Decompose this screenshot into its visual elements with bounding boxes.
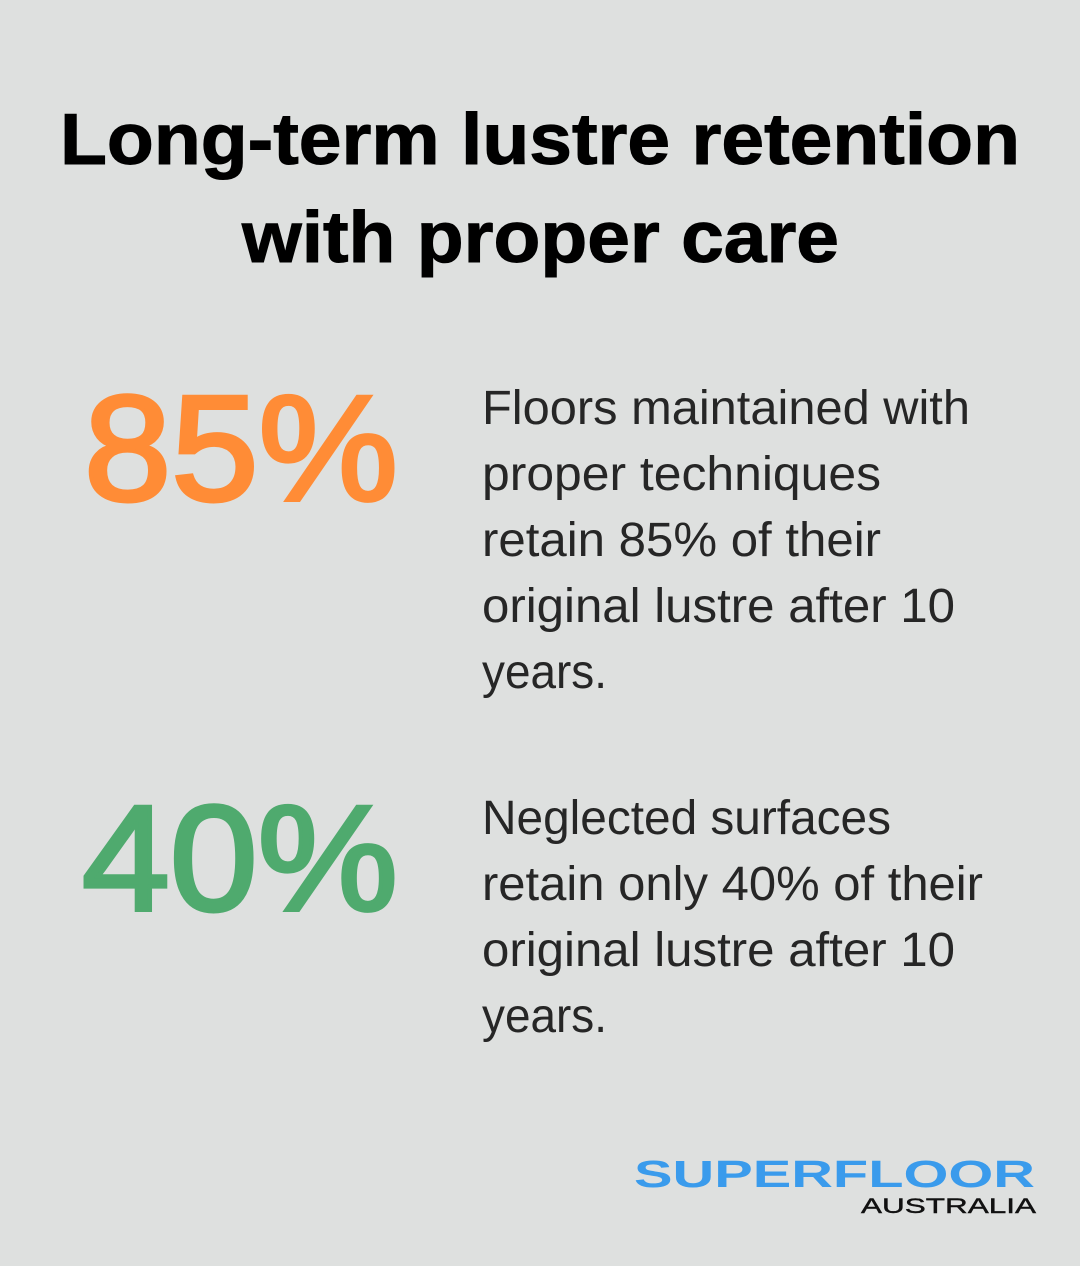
panel: 85% statistic [84,364,970,699]
title: with proper care [241,198,839,278]
title: Long-term lustre retention [60,100,1020,180]
description: proper techniques [482,382,970,699]
title [60,100,1020,278]
stat value: 40%: 40% [82,774,398,942]
description: proper techniques: proper techniques [482,448,881,501]
description: neglected surfaces: Neglected surfaces [482,792,891,845]
description: proper techniques: years. [482,646,607,699]
description: neglected surfaces [482,792,983,1043]
logo subtitle: AUSTRALIA [861,1195,1036,1218]
description: neglected surfaces: original lustre after 10 [482,924,955,977]
description: neglected surfaces: years. [482,990,607,1043]
description: proper techniques: retain 85% of their [482,514,881,567]
panel: 40% statistic [82,774,983,1043]
description: proper techniques: original lustre after 10 [482,580,955,633]
description: neglected surfaces: retain only 40% of their [482,858,983,911]
logo wordmark: SUPERFLOOR [634,1154,1035,1196]
description: proper techniques: Floors maintained with [482,382,970,435]
logo: Superfloor Australia [634,1154,1036,1218]
stat value: 85%: 85% [84,364,398,532]
